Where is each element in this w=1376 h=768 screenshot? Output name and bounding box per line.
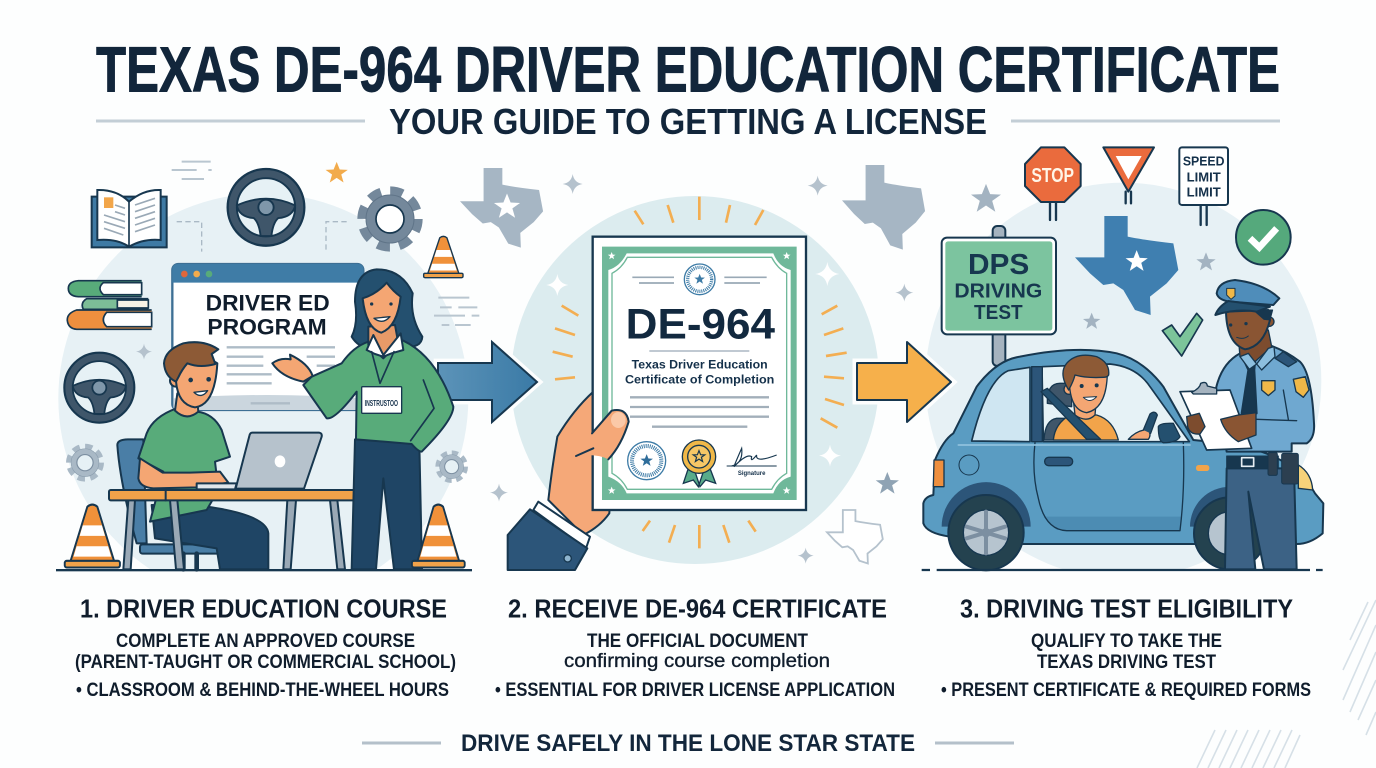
- panel 1: driver education illustration: [56, 162, 537, 603]
- mirror: [1158, 423, 1180, 443]
- tail light: [933, 460, 944, 487]
- background circle: [925, 183, 1321, 579]
- front window: [1042, 364, 1189, 442]
- certificate code: DE-964: [626, 301, 775, 349]
- icon: green check circle: [1236, 210, 1291, 265]
- green ornamental border: [602, 247, 797, 500]
- icon: speed limit sign: LIMIT: [1187, 185, 1221, 200]
- student hair: [164, 342, 218, 382]
- car body: [923, 350, 1323, 544]
- step 1 bullet: • CLASSROOM & BEHIND-THE-WHEEL HOURS: [76, 680, 449, 701]
- arrow: orange: [857, 342, 951, 422]
- rays: [553, 197, 847, 548]
- bottom seal: [628, 442, 666, 480]
- icon: speed limit sign: LIMIT: [1187, 169, 1221, 184]
- icon: yield sign: [1103, 147, 1154, 203]
- instructor collar: [367, 333, 403, 357]
- sleeve: [508, 509, 587, 570]
- browser window: driver ed program: [172, 264, 363, 410]
- officer hands: [1187, 413, 1205, 434]
- texas silhouette: left: [460, 168, 543, 248]
- headrest and seat: [1044, 383, 1072, 440]
- browser window: driver ed program: PROGRAM: [207, 314, 327, 339]
- signature: Signature: [738, 471, 766, 477]
- name badge: INSTRUSTOO: [365, 399, 398, 408]
- student neck: [175, 393, 198, 416]
- instructor arm line: [411, 380, 434, 441]
- background circle: [58, 193, 468, 603]
- step 3 heading: 3. DRIVING TEST ELIGIBILITY: [960, 594, 1293, 624]
- icon: open book: [92, 190, 167, 247]
- laptop: [197, 433, 322, 489]
- lower door band: [1043, 517, 1182, 530]
- icon: steering wheel top: [228, 169, 304, 246]
- officer badge patches: [1262, 377, 1309, 397]
- clipboard: [1180, 390, 1252, 450]
- icon: blue texas map: [1075, 216, 1178, 315]
- instructor pants: [352, 439, 422, 569]
- door: [1034, 443, 1184, 531]
- step 2 line 1: THE OFFICIAL DOCUMENT: [587, 631, 808, 652]
- student arm: [138, 458, 228, 488]
- step 1 line 1: COMPLETE AN APPROVED COURSE: [116, 631, 415, 652]
- officer epaulet: [1275, 352, 1297, 367]
- instructor face: [363, 283, 401, 333]
- DPS driving test sign: DRIVING: [954, 280, 1042, 302]
- officer neck: [1238, 330, 1272, 362]
- certificate: Certificate of Completion: [625, 373, 774, 387]
- desk: [109, 490, 357, 569]
- DPS driving test sign: [942, 226, 1056, 366]
- step 1 heading: 1. DRIVER EDUCATION COURSE: [80, 594, 447, 624]
- officer belt: [1227, 453, 1298, 484]
- step 3 line 1: QUALIFY TO TAKE THE: [1031, 631, 1222, 652]
- icon: small gear left: [69, 446, 101, 479]
- arrow: blue: [438, 342, 537, 422]
- thumb over certificate: [508, 410, 629, 570]
- subtitle with rules: YOUR GUIDE TO GETTING A LICENSE: [389, 101, 987, 142]
- officer hair: [1253, 310, 1273, 320]
- instructor hair: [352, 269, 422, 347]
- footer tagline: DRIVE SAFELY IN THE LONE STAR STATE: [461, 730, 915, 757]
- step 2 text: [495, 594, 895, 701]
- icon: sparkle: [136, 344, 152, 360]
- instructor neck: [368, 325, 398, 358]
- person: student: [138, 342, 268, 569]
- step 2 heading: 2. RECEIVE DE-964 CERTIFICATE: [508, 594, 887, 624]
- student legs: [152, 505, 268, 569]
- step 1 line 2: (PARENT-TAUGHT OR COMMERCIAL SCHOOL): [75, 652, 456, 673]
- icon: book stack: [67, 281, 152, 329]
- student face: [176, 359, 217, 407]
- ribbon medal: [682, 440, 716, 487]
- step 2 line 2: confirming course completion: [564, 651, 830, 672]
- icon: traffic cone top: [424, 236, 463, 278]
- step 1 text: [75, 594, 456, 701]
- person: police officer: [1180, 280, 1314, 569]
- step 3 line 2: TEXAS DRIVING TEST: [1037, 652, 1216, 673]
- officer face: [1226, 310, 1270, 349]
- cuff: [533, 502, 590, 548]
- certificate description: Texas Driver Education: [632, 358, 768, 372]
- hand palm behind certificate: [548, 392, 613, 535]
- chair: [117, 439, 238, 569]
- officer torso: [1216, 346, 1314, 452]
- icon: cone bottom right: [412, 505, 465, 567]
- corner hatch: [1197, 600, 1376, 768]
- panel 2: certificate illustration: [490, 174, 913, 570]
- icon: speed limit sign: [1179, 147, 1228, 225]
- rear window: [972, 367, 1030, 442]
- star on texas: [494, 194, 520, 218]
- front wheel: [1190, 487, 1270, 569]
- icon: stop sign: [1025, 147, 1081, 220]
- officer collar: [1240, 347, 1275, 370]
- student ear: [170, 375, 182, 387]
- icon: stop sign: STOP: [1031, 165, 1074, 187]
- officer hat: [1217, 280, 1279, 305]
- icon: cone bottom left: [65, 505, 120, 567]
- name badge: [362, 387, 402, 413]
- car: [923, 350, 1323, 570]
- rear wheel: [942, 482, 1031, 570]
- icon: gear: [362, 191, 418, 247]
- icon: speed limit sign: SPEED: [1183, 153, 1225, 168]
- ground line: [56, 569, 472, 571]
- step 2 bullet: • ESSENTIAL FOR DRIVER LICENSE APPLICATION: [495, 680, 895, 701]
- decorative dashes: [172, 162, 479, 325]
- signature: [727, 448, 777, 477]
- person: instructor: [272, 269, 453, 569]
- officer legs: [1225, 468, 1297, 569]
- officer ear: [1265, 317, 1274, 326]
- icon: stars: [971, 184, 1216, 329]
- texas silhouette: right: [842, 165, 925, 250]
- icon: green check mark: [1162, 313, 1203, 356]
- driver: [1041, 355, 1157, 440]
- panel 3: driving test illustration: [922, 147, 1323, 579]
- sparkles: [490, 174, 913, 564]
- step 3 text: [941, 594, 1311, 701]
- DPS driving test sign: TEST: [974, 302, 1023, 324]
- officer sleeve lines: [1257, 390, 1297, 421]
- icon: steering wheel left: [64, 353, 134, 423]
- icon: small gear right: [438, 453, 466, 481]
- instructor hand: [272, 355, 313, 382]
- lanyard: [372, 352, 394, 383]
- instructor torso and arms: [303, 341, 453, 452]
- DPS driving test sign: DPS: [968, 249, 1029, 281]
- background circle: [511, 196, 879, 564]
- step 3 bullet: • PRESENT CERTIFICATE & REQUIRED FORMS: [941, 680, 1311, 701]
- texas outline small: [827, 510, 883, 563]
- ground line: [922, 566, 1323, 573]
- icon: star: [326, 162, 348, 183]
- browser window: driver ed program: DRIVER ED: [206, 291, 330, 316]
- student torso: [138, 408, 230, 522]
- officer tie: [1242, 362, 1257, 413]
- top seal: [684, 264, 715, 295]
- subtitle with rules: [96, 101, 1280, 142]
- certificate: [593, 237, 806, 510]
